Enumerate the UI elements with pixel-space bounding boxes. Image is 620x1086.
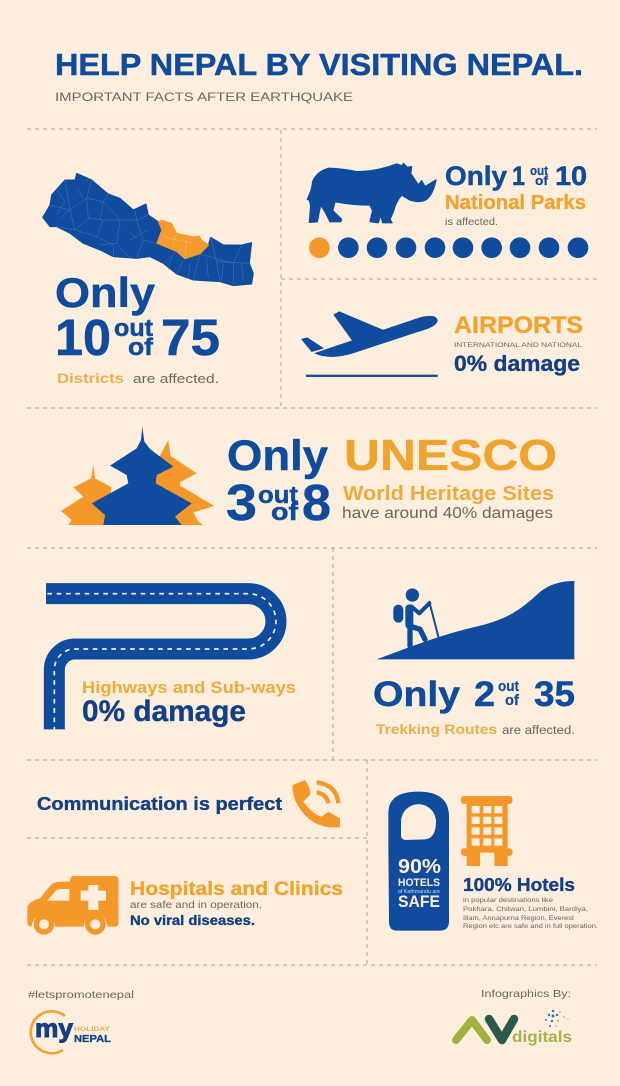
label: highways and sub-ways: Highways and Sub-ways bbox=[82, 679, 296, 697]
icon: hiker and hill bbox=[377, 581, 574, 659]
big number: 10 out of 75 bbox=[55, 269, 220, 366]
icon: Nepal map bbox=[43, 173, 253, 286]
stat: 1 out of 10: 1 bbox=[512, 161, 525, 191]
label: 100% hotels: 100% Hotels bbox=[463, 875, 575, 895]
stat: 2 out of 35: of bbox=[505, 693, 519, 709]
logo: my holiday nepal: NEPAL bbox=[74, 1033, 112, 1045]
panel: UNESCO bbox=[61, 427, 557, 531]
stat: 1 out of 10: 10 bbox=[555, 161, 587, 191]
icon: door hanger bbox=[388, 792, 449, 931]
stat: 1 out of 10: of bbox=[535, 174, 549, 188]
caption: districts: Districts bbox=[57, 370, 124, 386]
stat: 3 out of 8: 8 bbox=[302, 474, 331, 531]
icon: rhino bbox=[307, 163, 436, 223]
stat: 2 out of 35 bbox=[373, 675, 575, 714]
text block: hotel destinations: Illam, Annapurna Region, Everest bbox=[463, 915, 574, 922]
caption: trekking routes: are affected. bbox=[502, 725, 575, 737]
panel: trekking bbox=[373, 581, 575, 737]
logo: AV digitals: digitals bbox=[512, 1029, 572, 1046]
stat: 3 out of 8: Only bbox=[227, 432, 328, 480]
caption: no viral diseases: No viral diseases. bbox=[130, 912, 255, 928]
logo: my holiday nepal bbox=[31, 1011, 112, 1053]
icon: plane bbox=[301, 311, 438, 377]
panel: hospitals bbox=[27, 876, 343, 935]
icon: pagoda bbox=[61, 427, 214, 525]
stat: 2 out of 35: Only bbox=[373, 675, 461, 714]
subtitle: IMPORTANT FACTS AFTER EARTHQUAKE bbox=[55, 90, 353, 104]
panel: communication bbox=[37, 780, 340, 827]
big number: 10 out of 75: of bbox=[128, 334, 154, 361]
stat: 1 out of 10: out bbox=[530, 164, 549, 178]
stat: 3 out of 8 bbox=[226, 432, 331, 531]
title: HELP NEPAL BY VISITING NEPAL. bbox=[55, 47, 583, 82]
text block: hotel destinations: in popular destinations like bbox=[463, 897, 554, 904]
label: airports: AIRPORTS bbox=[454, 312, 583, 339]
big number: 10 out of 75: 10 bbox=[55, 309, 111, 366]
icon: hotel building bbox=[461, 796, 513, 866]
stat: 3 out of 8: out bbox=[258, 482, 298, 509]
label: communication is perfect: Communication is perfect bbox=[37, 793, 282, 814]
logo: AV digitals bbox=[456, 1010, 572, 1046]
caption: districts bbox=[57, 370, 219, 386]
caption: districts: are affected. bbox=[133, 371, 219, 386]
icon: door hanger: 90% bbox=[398, 856, 441, 878]
dot chart: one of ten bbox=[309, 237, 588, 258]
label: UNESCO: UNESCO bbox=[344, 431, 557, 480]
panel: districts bbox=[43, 173, 253, 386]
panel: national parks bbox=[307, 161, 588, 258]
caption: international and national: INTERNATIONAL AND NATIONAL bbox=[454, 342, 582, 349]
label: national parks: National Parks bbox=[445, 192, 586, 214]
big number: 10 out of 75: 75 bbox=[161, 309, 220, 366]
panel: hotels bbox=[388, 792, 598, 931]
icon: door hanger: SAFE bbox=[398, 892, 440, 911]
icon: phone bbox=[292, 780, 340, 827]
stat: 2 out of 35: out bbox=[498, 679, 519, 695]
credit: infographics by: Infographics By: bbox=[481, 988, 571, 1000]
stat: 3 out of 8: 3 bbox=[226, 474, 257, 531]
label: world heritage sites: World Heritage Sites bbox=[343, 483, 554, 505]
stat: 0% damage: 0% damage bbox=[82, 695, 246, 728]
panel: highways bbox=[46, 594, 296, 729]
big number: 10 out of 75: out bbox=[114, 315, 153, 342]
stat: 2 out of 35: 2 bbox=[474, 675, 495, 714]
text block: hotel destinations bbox=[463, 897, 598, 930]
stat: 1 out of 10 bbox=[445, 161, 587, 191]
logo: my holiday nepal: my bbox=[35, 1013, 74, 1043]
hashtag: #letspromotenepal bbox=[28, 989, 134, 1001]
icon: door hanger: of Kathmandu are bbox=[398, 889, 440, 895]
caption: damages: have around 40% damages bbox=[342, 505, 553, 522]
icon: road bbox=[46, 594, 276, 729]
stat: 1 out of 10: Only bbox=[445, 161, 507, 191]
caption: is affected: is affected. bbox=[445, 217, 498, 228]
text block: hotel destinations: Region etc are safe and in full operation. bbox=[463, 923, 598, 930]
caption: trekking routes bbox=[376, 721, 575, 737]
panel: airports bbox=[301, 311, 583, 377]
label: hospitals and clinics: Hospitals and Clinics bbox=[130, 878, 343, 900]
stat: 3 out of 8: of bbox=[271, 499, 299, 526]
stat: 2 out of 35: 35 bbox=[534, 675, 575, 714]
text block: hotel destinations: Pokhara, Chitwan, Lumbini, Bardiya, bbox=[463, 906, 588, 913]
stat: 0% damage: 0% damage bbox=[454, 351, 580, 376]
caption: trekking routes: Trekking Routes bbox=[376, 721, 497, 737]
icon: door hanger: HOTELS bbox=[398, 877, 440, 889]
icon: ambulance bbox=[27, 876, 118, 935]
logo: my holiday nepal: HOLIDAY bbox=[74, 1026, 111, 1033]
caption: safe and in operation: are safe and in operation. bbox=[130, 899, 262, 911]
big number: 10 out of 75: Only bbox=[55, 269, 156, 316]
